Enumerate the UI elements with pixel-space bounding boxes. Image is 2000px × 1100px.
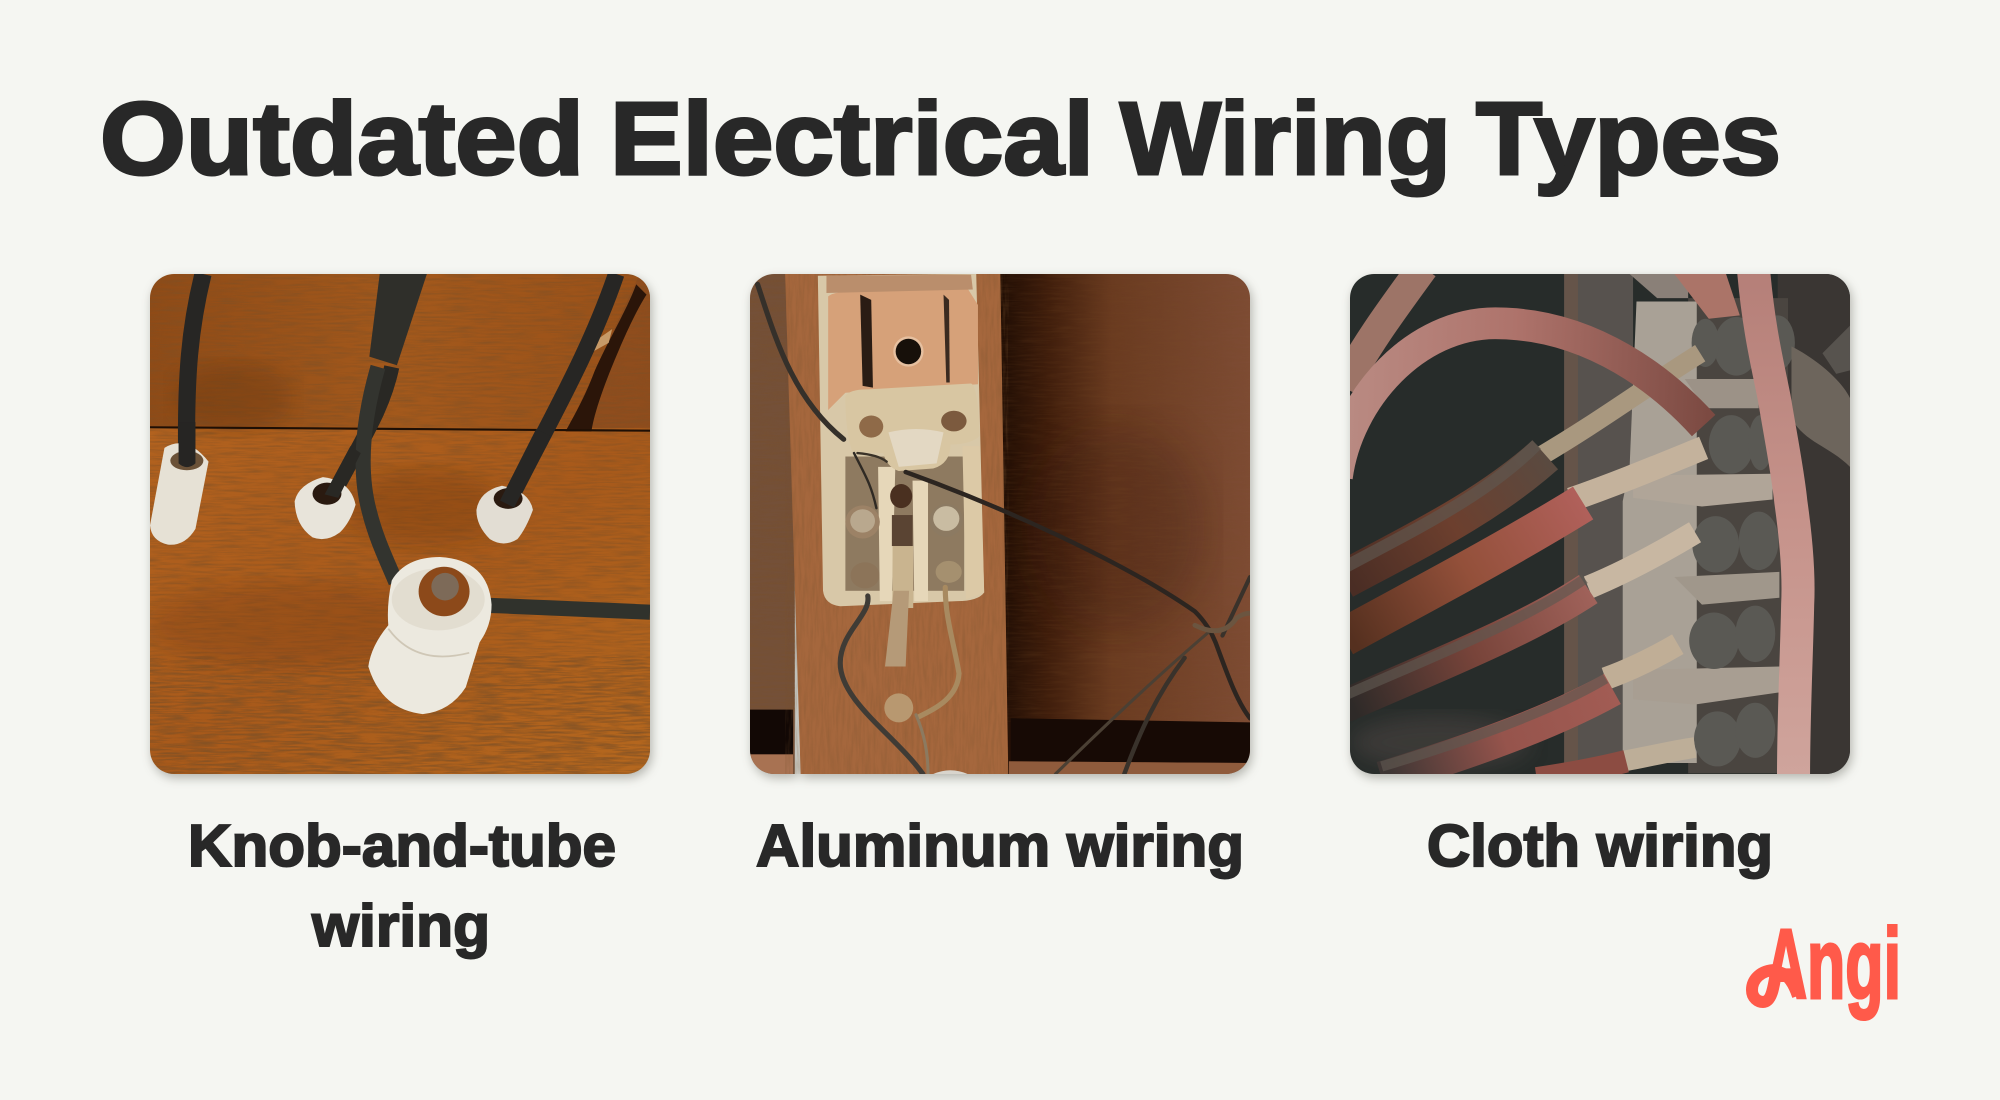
terminal block <box>1623 302 1697 763</box>
photo: aluminum wiring <box>746 272 1258 784</box>
cloth cables <box>1344 455 1545 580</box>
cable dust highlights <box>1344 444 1606 766</box>
insulator: large knob <box>368 557 492 714</box>
label: knob-and-tube wiring: wiring <box>311 893 490 959</box>
wire: right tail <box>507 432 543 504</box>
logo: Angi: ngi <box>1807 908 1901 1020</box>
logo: Angi: A <box>1765 909 1807 1019</box>
dust clump <box>1791 346 1850 467</box>
page background <box>102 98 1898 1021</box>
wire: left <box>187 274 203 465</box>
frayed cable tips <box>1540 353 1700 457</box>
panel: cloth wiring <box>1346 272 1858 880</box>
porcelain cap <box>845 384 980 471</box>
upper tan housing <box>828 288 978 410</box>
title: Wiring <box>1120 81 1451 196</box>
dark recess behind screws <box>1688 298 1788 773</box>
insulator: middle <box>295 477 356 539</box>
label: aluminum wiring: Aluminum wiring <box>756 813 1244 879</box>
rear column <box>1564 274 1633 763</box>
rear fabric cable <box>1344 267 1423 388</box>
upper frayed cable <box>1674 274 1740 319</box>
logo: Angi <box>1746 908 1901 1021</box>
title: Outdated <box>100 81 584 196</box>
label: cloth wiring: Cloth wiring <box>1427 813 1773 879</box>
right vertical cloth cable <box>1754 271 1798 777</box>
title: Types <box>1476 81 1781 196</box>
label: knob-and-tube wiring <box>188 813 616 960</box>
wire: centre sleeve <box>369 274 427 365</box>
panel: aluminum wiring <box>746 272 1258 880</box>
arched cloth cable <box>1337 323 1704 477</box>
insulator: left <box>150 443 209 545</box>
photo: cloth wiring <box>1346 272 1858 784</box>
switch base plate <box>818 274 984 606</box>
panel: knob-and-tube wiring <box>146 272 658 960</box>
insulator: right <box>476 486 533 543</box>
screws <box>1689 315 1795 766</box>
label: knob-and-tube wiring: Knob-and-tube <box>188 813 616 879</box>
title <box>100 81 1781 198</box>
photo: knob-and-tube wiring <box>146 272 658 784</box>
loose wires <box>758 284 1250 774</box>
title: Electrical <box>610 81 1094 196</box>
screws <box>845 505 880 538</box>
